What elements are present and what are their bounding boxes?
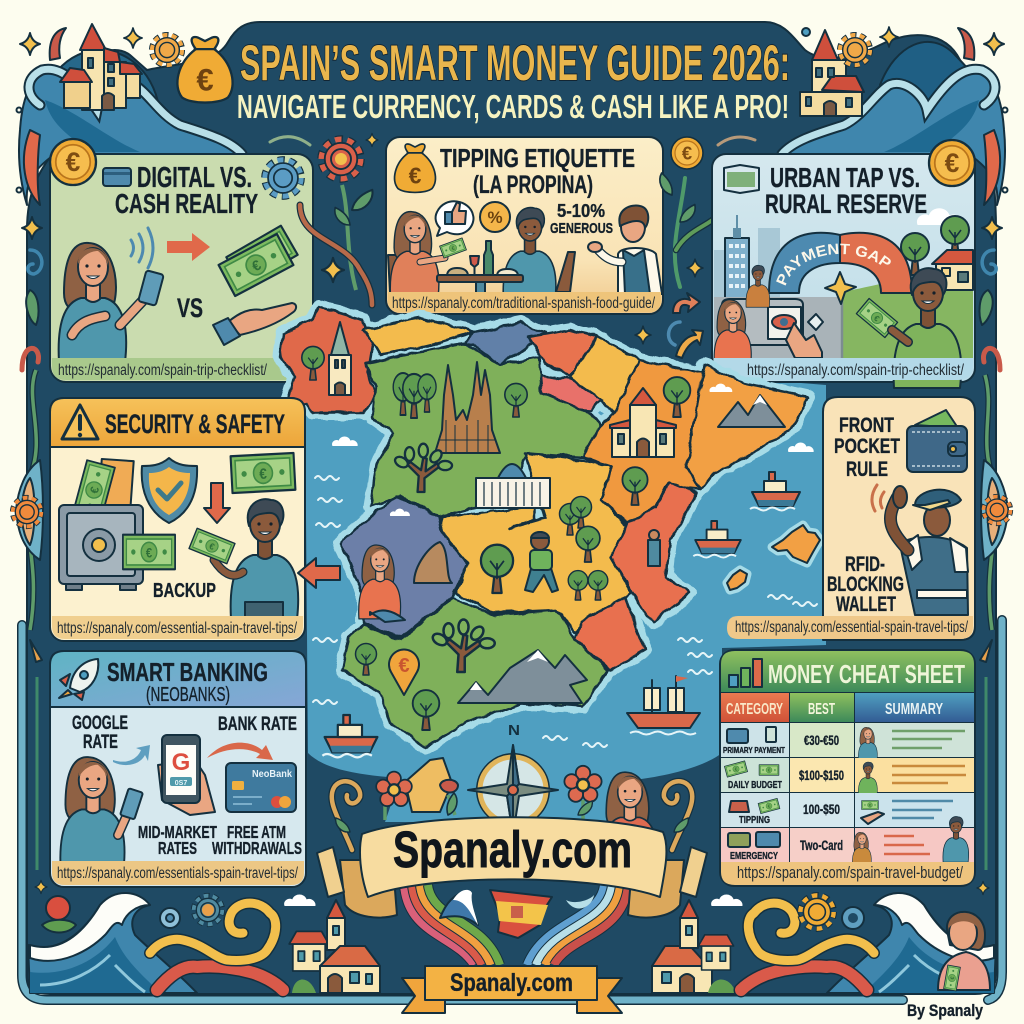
payment gap arc: PAYMENT GAP	[776, 244, 891, 286]
icon: rocket	[59, 659, 98, 700]
banknote in safe	[123, 535, 175, 569]
vine with flower gear	[300, 140, 377, 305]
map regions	[280, 307, 808, 747]
heading rfid wallet: WALLET	[836, 593, 896, 616]
labels: RATE	[83, 732, 118, 753]
icon: rose	[42, 896, 76, 932]
table row: primary payment	[721, 723, 974, 761]
man with cash	[856, 268, 961, 388]
icon: gears	[801, 896, 864, 929]
andalusia olive tree and trees	[356, 620, 495, 730]
compass: N	[508, 722, 520, 739]
table column headers: CATEGORY	[726, 701, 783, 718]
sea decorations	[313, 437, 817, 747]
city skyline	[714, 215, 780, 300]
arrow to security panel	[298, 558, 340, 588]
map pin: €	[398, 655, 410, 677]
balearic islands	[727, 520, 855, 590]
wave and swirl scenery	[28, 893, 283, 993]
labels: WITHDRAWALS	[212, 838, 302, 858]
icon: bar chart	[729, 659, 762, 687]
table row: daily budget: $100-$150	[799, 768, 844, 783]
pointing hand	[786, 323, 822, 358]
vs label: VS	[177, 293, 203, 323]
phone with google: 0S7	[175, 780, 187, 787]
small ribbon banner	[402, 966, 622, 1013]
ships	[322, 472, 800, 757]
banner text: Spanaly.com	[393, 821, 632, 878]
arrow down	[204, 483, 230, 523]
heading: SECURITY & SAFETY	[105, 409, 285, 439]
table row: tipping: TIPPING	[739, 814, 770, 826]
top decorations	[16, 27, 1008, 192]
icon: warning triangle	[62, 405, 98, 439]
rural ground	[714, 208, 973, 359]
payment gap arc	[768, 232, 912, 294]
icon: banknotes	[219, 226, 298, 296]
wave and swirl scenery	[741, 893, 996, 993]
woman at rock	[359, 542, 452, 622]
woman beside compass	[602, 772, 657, 870]
top-left wave corner	[19, 24, 242, 205]
heading front pocket: POCKET	[834, 435, 900, 458]
heading: SMART BANKING	[107, 657, 268, 687]
backup label: BACKUP	[153, 580, 216, 602]
heading: DIGITAL VS.	[137, 162, 252, 194]
andalusia mountains	[458, 650, 587, 703]
percent coin: %	[487, 208, 503, 227]
hiker	[525, 532, 558, 592]
heading	[440, 143, 635, 199]
panel: front pocket rule	[727, 397, 975, 640]
heading: (NEOBANKS)	[146, 684, 230, 706]
neobank card	[226, 763, 296, 812]
header band	[50, 651, 306, 707]
heading rfid wallet	[827, 553, 904, 616]
panel: smart banking	[50, 651, 306, 887]
woman with banknotes	[938, 912, 990, 991]
middle right decorations	[635, 137, 724, 358]
icon: gears	[160, 896, 222, 928]
table scene	[388, 208, 575, 301]
labels: BANK RATE	[218, 714, 297, 735]
heading	[107, 657, 268, 706]
woman with phone	[60, 757, 143, 870]
arrow red	[207, 743, 273, 760]
url: https://spanaly.com/spain-trip-checklist/	[58, 362, 268, 379]
scroll swirls	[332, 781, 692, 850]
heading: (LA PROPINA)	[473, 171, 593, 199]
heading: URBAN TAP VS.	[770, 162, 920, 193]
mini Spain flag map	[440, 890, 594, 938]
table row: emergency: EMERGENCY	[730, 850, 778, 862]
capitol building	[476, 464, 550, 508]
url pill	[727, 616, 973, 639]
speech bubble thumbs up	[436, 201, 473, 236]
percent coin	[480, 202, 510, 232]
url: https://spanaly.com/spain-travel-budget/	[737, 864, 963, 882]
heading: CASH REALITY	[115, 188, 258, 219]
url band	[52, 861, 304, 885]
cathedral	[435, 362, 500, 453]
panel: security and safety	[50, 398, 305, 641]
heading: RURAL RESERVE	[765, 189, 927, 219]
icon: contactless waves	[131, 228, 153, 268]
north trees	[393, 373, 527, 492]
panel: urban tap vs rural reserve	[711, 153, 976, 389]
url: https://spanaly.com/essential-spain-travel-tips/	[57, 620, 298, 637]
neobank card: NeoBank	[252, 769, 292, 780]
security guard	[890, 486, 968, 615]
heading front pocket	[834, 414, 900, 481]
arrow	[167, 233, 210, 261]
payment terminal	[722, 299, 823, 345]
url: https://spanaly.com/traditional-spanish-food-guide/	[392, 295, 656, 312]
title	[177, 35, 790, 125]
phone with google: G	[172, 749, 190, 776]
table row: tipping: 100-$50	[803, 802, 840, 817]
table column headers: BEST	[808, 701, 835, 718]
url band	[52, 358, 311, 380]
url band	[721, 862, 974, 885]
heading rfid wallet: BLOCKING	[827, 573, 904, 596]
table row: primary payment: €30-€50	[804, 733, 839, 748]
top-right wave corner	[782, 30, 1005, 205]
panel: digital vs cash	[50, 154, 313, 382]
compass	[468, 722, 558, 835]
bottom right scene	[711, 893, 996, 993]
arrow blue	[113, 745, 150, 765]
woman at terminal	[714, 300, 751, 365]
map of Spain	[280, 307, 855, 757]
heading	[765, 162, 927, 219]
table column headers	[721, 693, 974, 722]
icon: coin top left	[50, 139, 96, 185]
labels: MID-MARKET	[138, 822, 217, 842]
header band	[721, 651, 974, 692]
labels: FREE ATM	[227, 822, 286, 842]
heading front pocket: RULE	[846, 458, 888, 481]
star signpost	[825, 272, 856, 358]
tip rate: GENEROUS	[550, 220, 613, 237]
icon: folded map	[724, 165, 759, 193]
url: https://spanaly.com/essentials-spain-travel-tips/	[57, 865, 299, 882]
icon: shield	[142, 458, 197, 523]
galicia tower and tree	[302, 322, 351, 395]
table column headers: SUMMARY	[885, 701, 943, 718]
icon: castle houses right	[800, 30, 864, 116]
outer frame band	[22, 620, 1002, 1000]
url band	[388, 292, 661, 312]
table row: daily budget: DAILY BUDGET	[728, 779, 782, 791]
heading rfid wallet: RFID-	[845, 553, 885, 576]
icon: money bag	[177, 37, 233, 103]
house and trees	[901, 216, 973, 290]
banknotes above safe	[73, 459, 134, 520]
catalonia mountains	[709, 384, 785, 427]
icon: signal arcs	[872, 485, 884, 511]
side ornaments right	[977, 217, 1010, 895]
map pin	[389, 650, 419, 695]
url band	[52, 616, 303, 639]
right town	[652, 900, 736, 993]
table row: primary payment: PRIMARY PAYMENT	[723, 745, 786, 755]
man with banknote	[189, 499, 298, 622]
icon: coin top right	[929, 140, 975, 186]
table row: emergency	[721, 817, 974, 866]
sailing ship	[627, 676, 700, 734]
woman with phone	[59, 243, 164, 362]
heading front pocket: FRONT	[839, 414, 894, 437]
icon: money bag	[395, 144, 435, 192]
map coast halo	[280, 307, 808, 747]
url band	[714, 358, 973, 380]
banknote top right	[231, 453, 295, 493]
second person	[746, 265, 770, 307]
icon: wallet	[907, 410, 967, 472]
panel: money cheat sheet	[720, 650, 975, 886]
phone with google	[158, 735, 215, 815]
table row: daily budget	[721, 758, 974, 796]
bottom left scene	[28, 893, 316, 993]
tip rate: 5-10%	[557, 201, 605, 221]
side ornaments left	[13, 217, 47, 894]
url: https://spanaly.com/spain-trip-checklist/	[747, 362, 965, 379]
credit: By Spanaly	[907, 1001, 983, 1020]
panel: tipping etiquette	[386, 137, 663, 314]
aragon palace and trees	[610, 377, 690, 505]
table row: tipping	[721, 793, 974, 827]
rainbow ribbons	[404, 885, 628, 965]
icon: card	[103, 168, 131, 186]
central trees	[481, 496, 608, 600]
sea behind the map	[305, 375, 826, 822]
heading: TIPPING ETIQUETTE	[440, 143, 635, 173]
icon: gear	[266, 161, 300, 195]
labels	[72, 713, 302, 858]
labels: GOOGLE	[72, 713, 128, 734]
heading	[115, 162, 258, 219]
waiter	[588, 206, 662, 294]
icon: open hand	[213, 303, 296, 345]
icon: castle houses	[60, 24, 142, 110]
icon: safe	[59, 505, 143, 590]
labels: RATES	[158, 838, 197, 858]
land patch and flowers near compass	[376, 758, 602, 820]
ribbon text: Spanaly.com	[450, 969, 573, 997]
header band	[50, 398, 305, 447]
main scroll banner	[317, 817, 707, 918]
table row: emergency: Two-Card	[800, 838, 843, 853]
tip rate	[550, 201, 613, 237]
valencia figure	[648, 530, 660, 566]
left town	[289, 900, 380, 993]
